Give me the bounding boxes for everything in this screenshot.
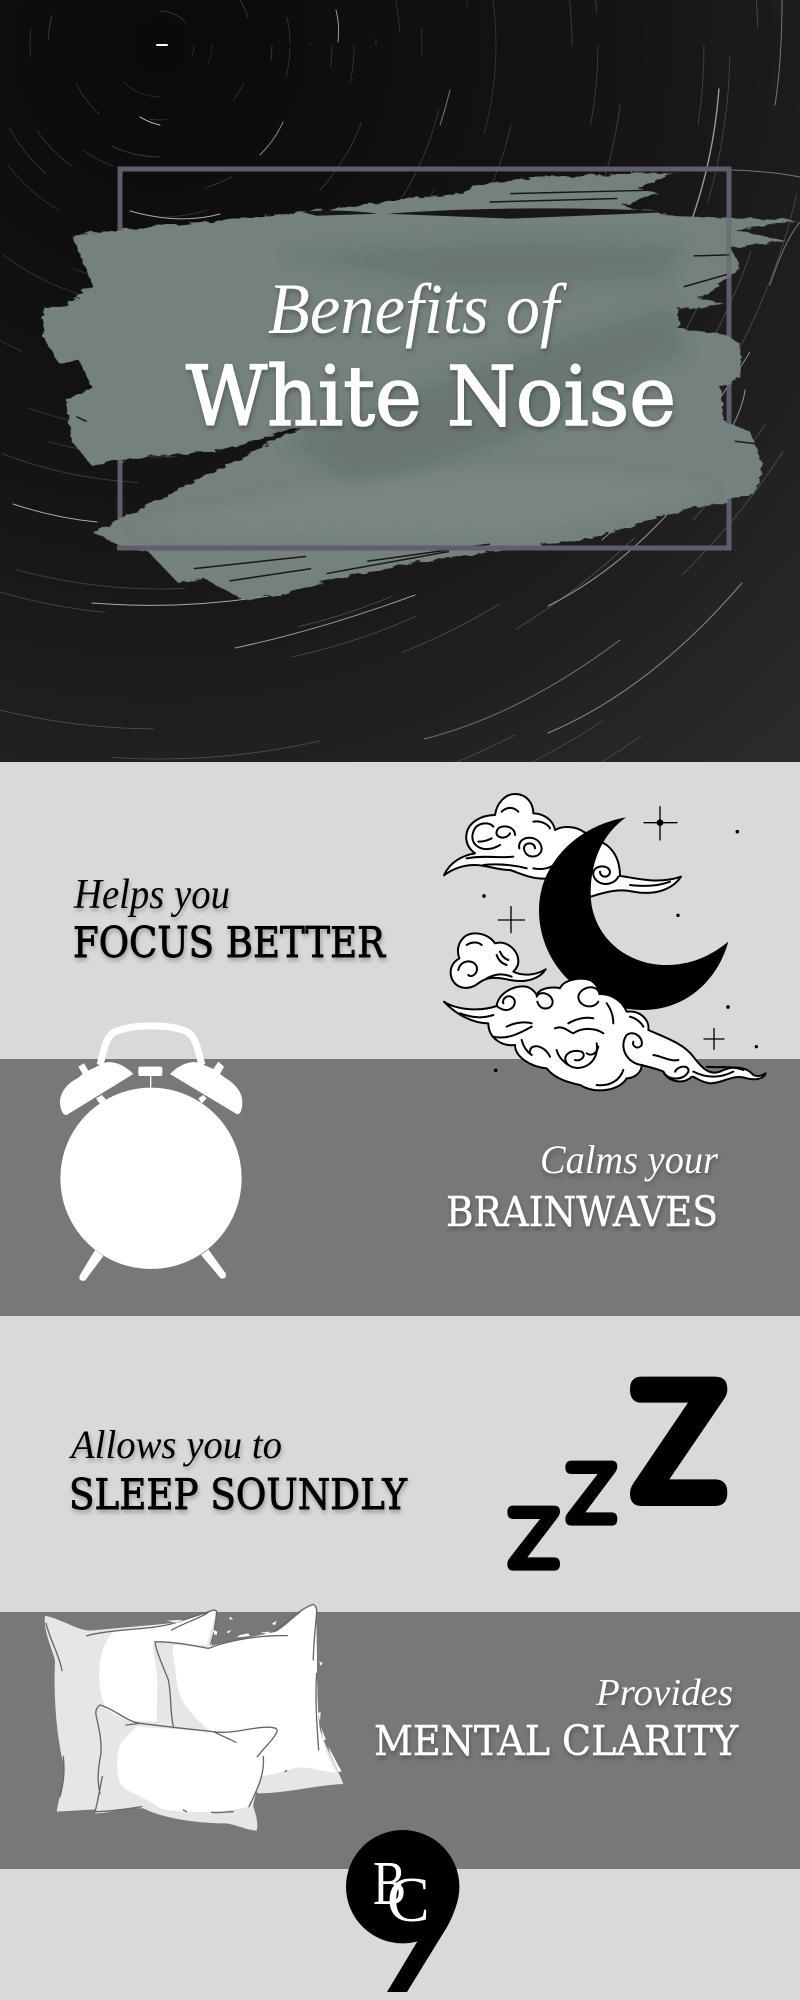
logo: BC 9 mark: C [387,1864,430,1935]
icon: zzz [507,1377,727,1571]
icon: pillows [45,1604,343,1831]
cloud: top [444,794,681,897]
panel: focus band [0,762,800,1059]
logo: BC 9 mark: B [373,1850,406,1918]
clock knob [138,1067,162,1076]
clock face [60,1088,242,1269]
clock legs [79,1249,226,1281]
cloud: small left [451,933,546,988]
title line: White Noise: White Noise [186,350,676,445]
panel: footer band [0,1869,800,2000]
icon: alarm clock [60,1026,242,1281]
logo: BC 9 mark [346,1830,459,1992]
stars and dots [482,807,758,1072]
pillow: back right [155,1605,343,1793]
brush stroke behind title [31,167,800,608]
frame: title rectangle [120,169,729,548]
bright star trails [13,0,800,739]
clock handle [100,1026,202,1065]
text: helps you focus better: Helps you [73,872,230,918]
icon: moon and clouds [444,794,766,1090]
text: provides mental clarity: Provides [595,1672,733,1714]
text: allows you to sleep soundly: SLEEP SOUNDLY [69,1470,408,1519]
pillow: front [95,1705,277,1831]
frame overlay [117,170,731,548]
text: provides mental clarity [374,1672,739,1765]
text: calms your brainwaves [446,1137,718,1236]
panel: starry header background [0,0,800,887]
text: allows you to sleep soundly: Allows you to [68,1422,282,1467]
text: provides mental clarity: MENTAL CLARITY [374,1717,739,1765]
text: helps you focus better: FOCUS BETTER [73,918,386,967]
text: calms your brainwaves: Calms your [540,1137,718,1182]
pillow specks [167,1617,342,1772]
moon crescent [539,817,728,1010]
title [186,269,676,445]
title line: Benefits of: Benefits of [268,269,568,349]
text: allows you to sleep soundly [68,1422,408,1519]
panel: clarity band [0,1612,800,1869]
text: calms your brainwaves: BRAINWAVES [446,1188,718,1236]
text: helps you focus better [73,872,386,967]
clock bells [60,1062,133,1115]
cloud: bottom large [444,979,766,1090]
pillow: back left [45,1610,217,1812]
panel: brainwaves band [0,1059,800,1316]
panel: sleep band [0,1316,800,1612]
pillow outlines [46,1604,319,1813]
